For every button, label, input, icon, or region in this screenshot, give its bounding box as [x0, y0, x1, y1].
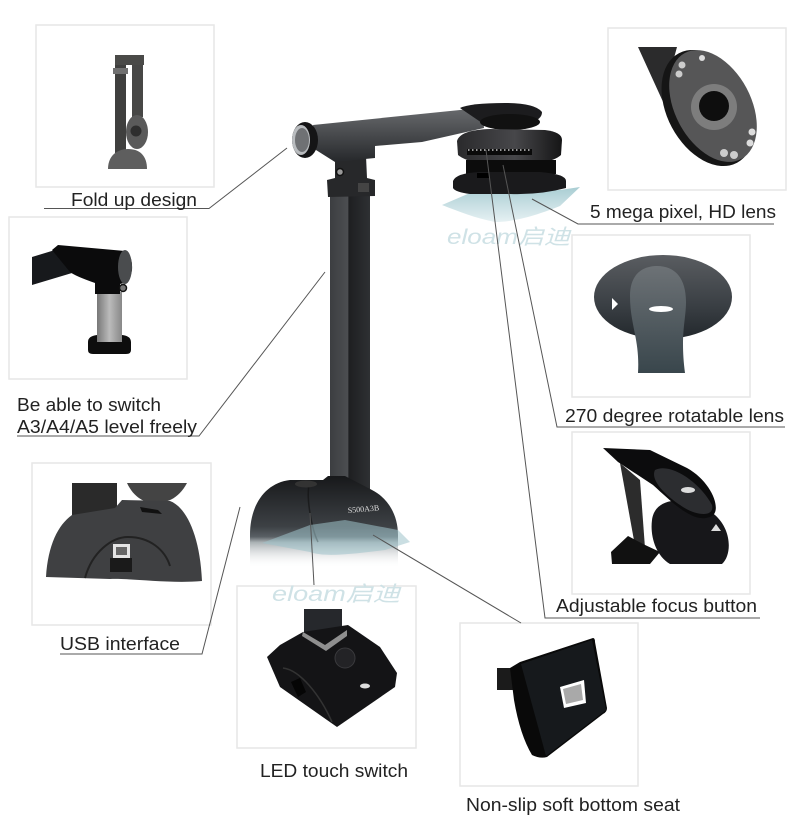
camera head: [453, 103, 566, 194]
main device: document camera: [250, 103, 580, 568]
icon: lens underside: [638, 34, 775, 182]
callout: HD lens: [532, 199, 776, 224]
callout: LED touch switch: [260, 513, 408, 781]
base: [250, 476, 410, 568]
callout: switch A3/A4/A5: A3/A4/A5 level freely: [17, 417, 197, 437]
panel: HD lens photo: [608, 28, 786, 190]
callout: bottom seat: [373, 535, 680, 815]
callout: rotatable lens: 270 degree rotatable lens: [565, 406, 784, 426]
watermark: lower eloam: eloam启迪: [272, 583, 403, 606]
icon: arm and column close-up: [32, 245, 132, 354]
callout: switch A3/A4/A5: Be able to switch: [17, 395, 161, 415]
panel: USB interface photo: [32, 463, 211, 625]
callout: USB interface: [60, 507, 240, 654]
callout: fold up design: Fold up design: [71, 190, 197, 210]
watermark: top eloam: eloam启迪: [447, 226, 572, 249]
horizontal arm: [313, 107, 484, 162]
icon: rotating head: [594, 255, 732, 373]
lens light reflection: [442, 187, 580, 222]
callout: focus button: Adjustable focus button: [556, 596, 757, 616]
hinge cap: [292, 122, 318, 158]
collar and clamp: [327, 156, 375, 197]
model label: S500A3B: [347, 503, 380, 515]
callout: switch A3/A4/A5: [17, 272, 325, 437]
callout: USB interface: USB interface: [60, 634, 180, 654]
panel: height switching photo: [9, 217, 187, 379]
callout: fold up design: [44, 148, 287, 210]
callout: HD lens: 5 mega pixel, HD lens: [590, 202, 776, 222]
icon: USB port close-up: [46, 483, 202, 582]
callout: rotatable lens: [503, 165, 785, 427]
callout: focus button: [486, 150, 760, 618]
icon: focus button side view: [603, 448, 729, 564]
panel: rotatable lens photo: [572, 235, 750, 397]
panel: LED touch switch photo: [237, 586, 416, 748]
panel: fold up design photo: [36, 25, 214, 187]
icon: folded camera: [108, 55, 148, 169]
callout: LED touch switch: LED touch switch: [260, 761, 408, 781]
panel: focus button photo: [572, 432, 750, 594]
callout: bottom seat: Non-slip soft bottom seat: [466, 795, 680, 815]
icon: LED switch base: [267, 609, 397, 727]
panel: bottom seat photo: [460, 623, 638, 786]
blue floor reflection: [262, 520, 410, 555]
icon: rubber bottom seat: [497, 638, 607, 758]
column: [330, 190, 370, 490]
